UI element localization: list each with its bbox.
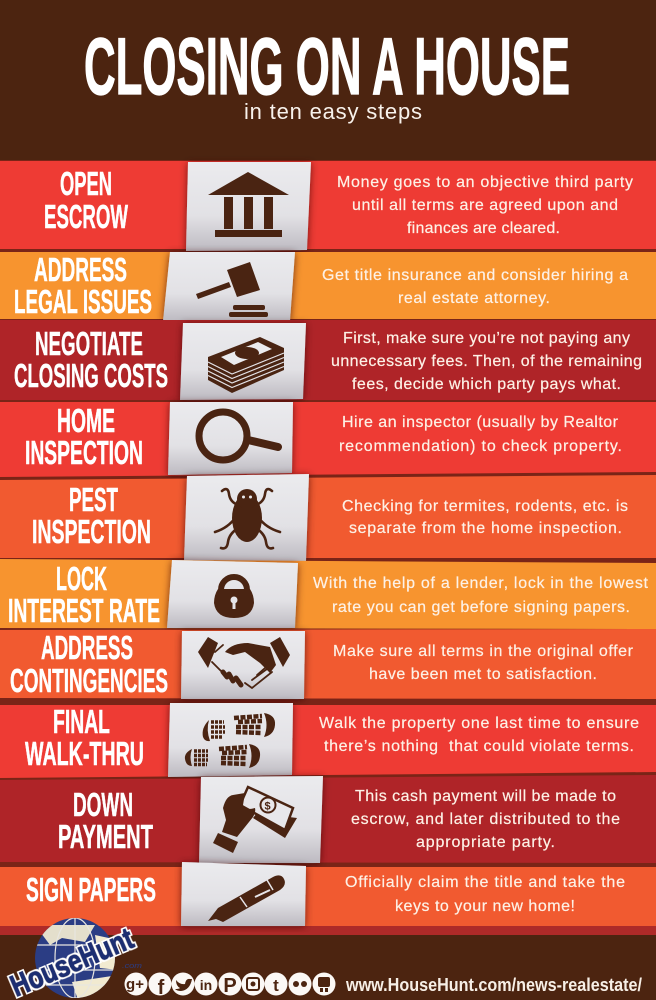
description: legal issues [322,267,628,307]
icon: bank [208,172,289,237]
icon: bug [215,489,280,548]
label: negotiate closing costs: CLOSING COSTS [14,358,168,395]
icon: gavel [196,262,268,317]
step 3: negotiate closing costs [0,320,656,400]
icon: padlock [214,577,254,618]
label: final walk-thru: WALK-THRU [25,736,144,773]
description: pest inspection: Checking for termites, rodents, etc. is [342,498,628,515]
step 4: home inspection [0,402,656,477]
card: lock interest rate [167,560,298,628]
description: down payment: escrow, and later distributed to the [351,811,620,828]
step 9: down payment [0,775,656,863]
description: contingencies [333,643,634,683]
card: final walk-thru [168,703,293,777]
label: home inspection: HOME [57,403,115,440]
description: sign papers: keys to your new home! [395,898,575,915]
description: open escrow [337,174,633,237]
band backing and bottom strip [0,160,656,935]
label: negotiate closing costs: NEGOTIATE [35,326,143,363]
social icons: g+ [126,976,144,993]
description: sign papers: Officially claim the title and take the [345,874,625,891]
step 7: address contingencies [0,629,656,700]
icon: money stack [208,337,284,393]
step 1: open escrow [0,161,656,251]
step 2: address legal issues [0,252,656,321]
label: lock interest rate: LOCK [56,561,107,598]
description: contingencies: have been met to satisfaction. [369,666,597,683]
label: down payment: DOWN [73,787,133,824]
card: closing costs [180,323,306,400]
description: pest inspection: separate from the home inspection. [349,520,622,537]
description: closing costs [331,330,642,393]
subtitle: in ten easy steps [244,99,422,124]
description: lock interest rate [313,575,649,616]
description: closing costs: First, make sure you’re not paying any [343,330,630,347]
label: final walk-thru: FINAL [53,704,110,741]
description: down payment [351,788,620,851]
description: pest inspection [342,498,628,537]
social icons: t [273,976,279,995]
step 10: sign papers [0,862,656,926]
step 6: lock interest rate [0,559,656,630]
description: final walk-thru [319,715,639,755]
label: lock interest rate: INTEREST RATE [8,593,160,630]
step 5: pest inspection [0,474,656,561]
step 8: final walk-thru [0,703,656,778]
description: open escrow: Money goes to an objective third party [337,174,633,191]
card: contingencies [181,631,305,699]
card: pest inspection [184,474,309,561]
card: down payment [199,776,323,863]
label: address legal issues: ADDRESS [34,252,127,289]
description: home inspection: recommendation) to check property. [339,438,622,455]
description: legal issues: Get title insurance and consider hiring a [322,267,628,284]
label: home inspection [25,403,143,472]
description: final walk-thru: Walk the property one last time to ensure [319,715,639,732]
label: home inspection: INSPECTION [25,435,143,472]
description: legal issues: real estate attorney. [398,290,550,307]
description: closing costs: fees, decide which party pays what. [352,376,621,393]
label: address contingencies [10,630,168,700]
icon: pen [208,875,285,922]
description: contingencies: Make sure all terms in the original offer [333,643,634,660]
label: sign papers: SIGN PAPERS [26,872,156,909]
label: address legal issues [14,252,152,321]
icon: magnifying glass [199,412,278,460]
description: lock interest rate: rate you can get before signing papers. [332,599,630,616]
description: final walk-thru: there’s nothing that could violate terms. [324,738,634,755]
label: pest inspection: PEST [69,482,118,519]
social icons [124,972,336,999]
description: sign papers [345,874,625,915]
label: open escrow: ESCROW [44,199,128,236]
description: open escrow: until all terms are agreed upon and [352,197,618,214]
description: lock interest rate: With the help of a lender, lock in the lowest [313,575,649,592]
icon: hand with cash: $ [264,800,271,812]
logo: HouseHunt globe: .com [122,963,142,970]
description: home inspection [339,414,622,455]
icon: hand with cash [213,787,297,853]
label: down payment: PAYMENT [58,819,153,856]
icon: handshake [198,637,290,688]
label: open escrow: OPEN [60,166,112,203]
label: address legal issues: LEGAL ISSUES [14,284,152,321]
social icons: P [223,975,237,997]
icon: footprints [185,713,275,768]
label: pest inspection [32,482,151,551]
description: home inspection: Hire an inspector (usually by Realtor [342,414,619,431]
description: open escrow: finances are cleared. [407,220,560,237]
card: open escrow [186,162,311,251]
description: down payment: This cash payment will be made to [355,788,616,805]
label: down payment [58,787,153,856]
label: address contingencies: ADDRESS [41,630,133,667]
label: negotiate closing costs [14,326,168,395]
description: closing costs: unnecessary fees. Then, of the remaining [331,353,642,370]
description: down payment: appropriate party. [416,834,555,851]
card: home inspection [168,402,293,475]
card: sign papers [181,862,306,926]
label: address contingencies: CONTINGENCIES [10,663,168,700]
card: legal issues [163,252,295,321]
social icons: f [158,977,165,999]
label: lock interest rate [8,561,160,630]
social icons: in [200,977,212,993]
label: final walk-thru [25,704,144,773]
label: open escrow [44,166,128,236]
label: pest inspection: INSPECTION [32,514,151,551]
